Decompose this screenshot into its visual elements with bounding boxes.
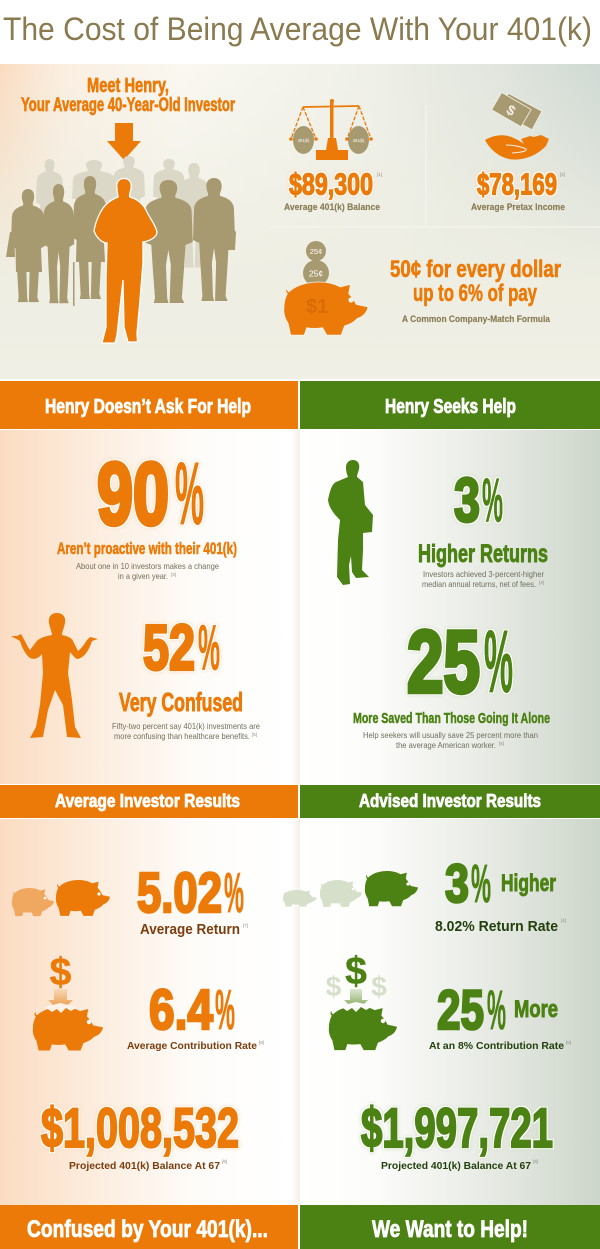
stat: 52 percent: [5] xyxy=(252,732,257,737)
stat: projected balance: [9] xyxy=(533,1159,538,1164)
stat: higher return: 3 xyxy=(445,854,469,914)
footer: want to help: We Want to Help! xyxy=(372,1216,528,1243)
stat: 52 percent xyxy=(112,612,260,741)
stat: average income: $78,169 xyxy=(477,166,557,202)
stat: average balance: Average 401(k) Balance xyxy=(284,202,380,212)
stat: more contribution: 25 xyxy=(437,978,484,1041)
stat: 3 percent: Higher Returns xyxy=(418,540,548,568)
stat: projected balance: [9] xyxy=(222,1159,227,1164)
icon: hand with money: $ xyxy=(513,103,527,121)
arrow pointing at Henry xyxy=(107,123,141,160)
icon: piggy bank with coins: 25¢ xyxy=(309,268,323,278)
footer: want to help xyxy=(300,1205,600,1249)
stat: 3 percent: 3 xyxy=(454,466,480,536)
stat: 25 percent xyxy=(353,612,550,750)
header: Henry doesn't ask for help xyxy=(0,381,298,429)
crowd silhouettes, back row xyxy=(36,156,210,268)
stat: 90 percent: Aren’t proactive with their 401(k) xyxy=(57,540,237,558)
stat: projected balance xyxy=(361,1096,553,1172)
stat: higher return: Higher xyxy=(501,870,556,897)
icon: dollars into pig xyxy=(326,950,397,1050)
icon: piggy bank with coins: 25¢ xyxy=(310,247,322,256)
header: average investor results: Average Investor Results xyxy=(55,791,240,811)
icon: hand with money xyxy=(485,92,549,160)
stat: contribution rate xyxy=(127,978,264,1052)
stat: average return: [7] xyxy=(243,923,248,928)
stat: 25 percent: Help seekers will usually save 25 percent more than xyxy=(363,730,538,740)
stat: 25 percent: 25 xyxy=(407,612,480,711)
stat: 52 percent: Very Confused xyxy=(119,687,243,717)
panel: average investor results: % xyxy=(224,861,244,925)
stat: higher return xyxy=(435,854,566,935)
header: advised investor results: Advised Investor Results xyxy=(359,791,541,811)
header: advised investor results xyxy=(300,785,600,818)
header: average investor results xyxy=(0,785,298,818)
stat: 25 percent: the average American worker. xyxy=(396,740,496,750)
stat: 90 percent xyxy=(57,444,237,581)
icon: dollars into pig: $ xyxy=(326,971,342,1002)
footer: confused: Confused by Your 401(k)... xyxy=(27,1216,268,1243)
icon: shrugging man xyxy=(11,613,98,738)
stat: projected balance xyxy=(41,1096,239,1172)
text: company match: A Common Company-Match Formula xyxy=(402,314,551,324)
stat: 90 percent: 90 xyxy=(97,444,169,543)
stat: 90 percent: in a given year. xyxy=(118,571,168,581)
text: company match xyxy=(390,256,561,324)
stat: average balance: $89,300 xyxy=(289,166,373,202)
icon: dollar into pig: $ xyxy=(50,951,72,994)
text: company match: up to 6% of pay xyxy=(413,280,537,307)
stat: contribution rate: [8] xyxy=(259,1040,264,1045)
stat: contribution rate: % xyxy=(215,978,235,1042)
stat: contribution rate: Average Contribution Rate xyxy=(127,1040,257,1052)
header: Henry seeks help: Henry Seeks Help xyxy=(385,396,516,418)
stat: 52 percent: more confusing than healthcare benefits. xyxy=(114,731,250,741)
footer: confused xyxy=(0,1205,298,1249)
stat: 90 percent: % xyxy=(175,444,204,543)
crowd silhouettes, front row xyxy=(6,176,236,306)
icon: hand with money: $ xyxy=(504,101,519,119)
panel: doesn't ask for help xyxy=(0,430,300,784)
stat: average return: 5.02 xyxy=(137,861,222,925)
stat: 90 percent: About one in 10 investors makes a change xyxy=(76,561,219,571)
stat: average income xyxy=(471,166,565,212)
icon: dollars into pig: $ xyxy=(371,971,387,1002)
stat: average return: Average Return xyxy=(140,921,240,938)
stat: 52 percent: % xyxy=(198,612,220,684)
stat: projected balance: $1,008,532 xyxy=(41,1096,239,1159)
stat: 52 percent: Fifty-two percent say 401(k) investments are xyxy=(112,721,260,731)
stat: 90 percent: [3] xyxy=(171,572,176,577)
panel: average investor results xyxy=(0,819,300,1205)
icon: piggy bank with coins: $1 xyxy=(306,296,328,318)
panel: seeks help xyxy=(300,430,600,784)
stat: 3 percent: median annual returns, net of fees. xyxy=(422,579,536,589)
stat: more contribution: More xyxy=(514,996,558,1023)
stat: more contribution xyxy=(429,978,571,1052)
stat: average balance xyxy=(284,166,382,212)
stat: 3 percent xyxy=(418,466,548,589)
icon: scale xyxy=(289,99,373,160)
stat: higher return: % xyxy=(471,854,491,914)
panel: advised investor results xyxy=(283,819,600,1205)
stat: average balance: [1] xyxy=(377,172,382,177)
icon: piggy bank with coins xyxy=(284,241,368,335)
stat: average income: [2] xyxy=(560,172,565,177)
icon: dollars into pig: $ xyxy=(345,950,367,993)
icon: scale: 401(k) xyxy=(298,138,310,143)
icon: dollar into pig xyxy=(33,951,103,1051)
stat: more contribution: At an 8% Contribution Rate xyxy=(429,1040,564,1052)
stat: contribution rate: 6.4 xyxy=(149,978,213,1042)
stat: higher return: 8.02% Return Rate xyxy=(435,918,558,935)
icon: Henry silhouette xyxy=(94,178,157,343)
icon: standing man xyxy=(328,460,373,585)
stat: higher return: [4] xyxy=(561,918,566,923)
stat: average income: Average Pretax Income xyxy=(471,202,565,212)
panel: meet Henry xyxy=(0,64,600,379)
heading: meet Henry: Your Average 40-Year-Old Investor xyxy=(21,95,235,116)
header: Henry seeks help xyxy=(300,381,600,429)
stat: projected balance: Projected 401(k) Balance At 67 xyxy=(69,1161,220,1172)
stat: 3 percent: Investors achieved 3-percent-higher xyxy=(423,569,544,579)
stat: more contribution: [6] xyxy=(566,1040,571,1045)
stat: 3 percent: % xyxy=(482,466,503,536)
stat: 25 percent: % xyxy=(484,612,513,711)
icon: two pigs xyxy=(12,880,110,916)
stat: 3 percent: [4] xyxy=(539,580,544,585)
header: Henry doesn't ask for help: Henry Doesn’t Ask For Help xyxy=(45,396,251,418)
icon: scale: 401(k) xyxy=(353,138,365,143)
stat: more contribution: % xyxy=(487,978,506,1041)
heading: meet Henry xyxy=(21,75,235,116)
stat: 52 percent: 52 xyxy=(143,612,195,684)
stat: 25 percent: [6] xyxy=(499,741,504,746)
heading: meet Henry: Meet Henry, xyxy=(87,75,169,97)
stat: projected balance: Projected 401(k) Balance At 67 xyxy=(381,1161,531,1172)
icon: three pigs xyxy=(283,871,418,907)
